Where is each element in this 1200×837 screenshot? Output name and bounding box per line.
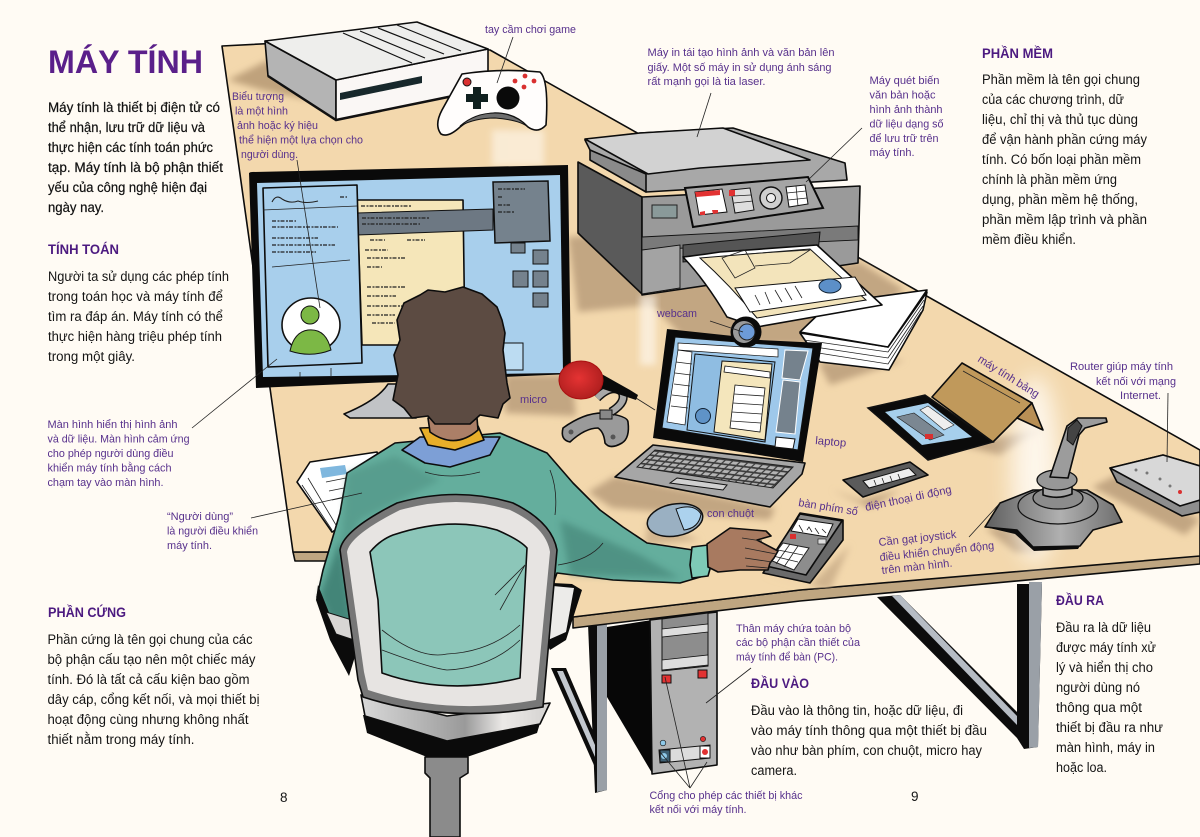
callout: icon: thể hiện một lựa chọn cho	[239, 134, 363, 146]
callout: printer	[648, 47, 834, 137]
callout: router	[1070, 361, 1176, 462]
label: webcam: webcam	[656, 308, 697, 320]
text block: input	[751, 703, 987, 778]
callout: joystick: Cần gạt joystick	[878, 529, 957, 549]
text block: software: để vận hành phần cứng máy	[982, 132, 1147, 147]
desk shadows and highlights	[228, 60, 1200, 590]
page number 8: 8	[280, 790, 288, 805]
grey bar	[357, 209, 493, 235]
laptop screen frame	[653, 329, 822, 462]
callout: ports: kết nối với máy tính.	[650, 804, 746, 816]
joystick base	[985, 490, 1122, 547]
small window	[503, 343, 523, 370]
mic ball	[559, 361, 603, 399]
text block: hardware: dây cáp, cổng kết nối, và mọi thiết bị	[48, 692, 260, 707]
callout: scanner: máy tính.	[870, 147, 914, 159]
laptop display	[662, 337, 813, 450]
text block: software: Phần mềm là tên gọi chung	[982, 72, 1140, 87]
callout: scanner	[806, 75, 944, 182]
callout: router: kết nối với mạng	[1096, 376, 1176, 388]
callout: user: là người điều khiển	[167, 526, 258, 538]
callout: printer: giấy. Một số máy in sử dụng ánh sáng	[648, 62, 832, 74]
paper stack	[800, 290, 927, 370]
text block: software: liệu, chỉ thị và thủ tục dùng	[982, 112, 1138, 127]
joystick	[985, 418, 1122, 551]
callout: joystick	[878, 503, 1000, 577]
tablet body	[868, 395, 993, 460]
numeric keypad	[763, 513, 843, 583]
printed paper	[683, 245, 882, 327]
icon: user avatar	[282, 298, 340, 354]
callout: scanner: để lưu trữ trên	[870, 133, 938, 145]
callout: screen: và dữ liệu. Màn hình cảm ứng	[48, 434, 190, 446]
printer side	[578, 162, 642, 294]
text block: output: thông qua một	[1056, 700, 1142, 715]
label: laptop: laptop	[815, 435, 847, 450]
text block: introduction: thể nhận, lưu trữ dữ liệu và	[48, 120, 205, 135]
printer lid	[585, 128, 847, 192]
callout: screen: chạm tay vào màn hình.	[48, 477, 164, 489]
person	[317, 287, 778, 640]
text block: input: Đầu vào là thông tin, hoặc dữ liệu, đi	[751, 703, 963, 718]
text block: hardware	[48, 632, 260, 747]
label: mouse: con chuột	[707, 508, 755, 520]
callout: user	[167, 493, 362, 552]
label: microphone: micro	[520, 394, 547, 406]
joystick handle	[1050, 418, 1107, 478]
text block: software: tính. Có bốn loại phần mềm	[982, 152, 1141, 167]
text block: output: được máy tính xử	[1056, 640, 1156, 655]
title: MÁY TÍNH	[48, 44, 203, 80]
desk legs	[551, 582, 1042, 793]
callout: scanner: hình ảnh thành	[870, 104, 942, 116]
label: tablet: máy tính bảng	[975, 353, 1041, 401]
page number 9: 9	[911, 789, 919, 804]
sweater	[317, 433, 710, 620]
text block: calculation: tìm ra đáp án. Máy tính có thể	[48, 309, 223, 324]
text block: introduction	[48, 100, 223, 215]
chair seat	[363, 715, 541, 757]
callout: icon: ảnh hoặc ký hiệu	[237, 120, 318, 132]
chair back padding	[347, 502, 550, 706]
label: mobile phone: điện thoại di động	[864, 484, 953, 514]
router	[1110, 455, 1200, 516]
game console	[265, 22, 488, 120]
heading: software: PHẦN MỀM	[982, 46, 1053, 61]
text block: output: thiết bị đầu ra như	[1056, 720, 1163, 735]
text block: output: hoặc loa.	[1056, 760, 1107, 775]
callout: icon: là một hình	[235, 106, 288, 118]
ports	[659, 736, 710, 763]
callout: ports: Cổng cho phép các thiết bị khác	[650, 790, 803, 802]
label: numeric keypad: bàn phím số	[798, 497, 859, 518]
left window panel	[263, 185, 362, 367]
newspaper	[297, 452, 390, 532]
text block: input: camera.	[751, 763, 797, 778]
text block: calculation: trong một giây.	[48, 349, 135, 364]
callout: router: Router giúp máy tính	[1070, 361, 1173, 373]
callout: joystick: điều khiển chuyển động	[879, 540, 995, 564]
small app tiles	[513, 250, 548, 307]
mesh back	[370, 524, 527, 686]
callout: scanner: Máy quét biến	[870, 75, 940, 87]
text block: software: dụng, phần mềm hệ thống,	[982, 192, 1138, 207]
cuff	[690, 545, 712, 578]
desk underside band	[293, 552, 1200, 628]
callout: computer tower: máy tính để bàn (PC).	[736, 652, 838, 664]
heading: input: ĐẦU VÀO	[751, 676, 809, 691]
text block: output: lý và hiển thị cho	[1056, 660, 1153, 675]
callout: scanner: dữ liệu dạng số	[870, 118, 944, 130]
callout: icon	[232, 91, 363, 308]
callout: router: Internet.	[1120, 390, 1161, 402]
text block: introduction: Máy tính là thiết bị điện tử có	[48, 100, 220, 115]
text block: calculation: thực hiện hàng triệu phép tính	[48, 329, 222, 344]
text block: calculation: Người ta sử dụng các phép tính	[48, 269, 229, 284]
callout: joystick: trên màn hình.	[881, 558, 953, 577]
callout: ports	[650, 677, 803, 816]
drive bays	[662, 613, 708, 671]
text block: hardware: bộ phận cấu tạo nên một chiếc máy	[48, 652, 256, 667]
text block: software: mềm điều khiển.	[982, 232, 1076, 247]
control panel	[685, 177, 823, 227]
text block: hardware: tính. Đó là tất cả cấu kiện bao gồm	[48, 672, 250, 687]
text block: output: màn hình, máy in	[1056, 740, 1155, 755]
callout: scanner: văn bản hoặc	[870, 90, 936, 102]
callout: printer: Máy in tái tạo hình ảnh và văn bản lên	[648, 47, 834, 59]
laptop base	[615, 445, 805, 507]
monitor frame	[249, 165, 571, 388]
callout: user: “Người dùng”	[167, 511, 233, 523]
text block: software: chính là phần mềm ứng	[982, 172, 1117, 187]
callout: game controller: tay cầm chơi game	[485, 24, 576, 36]
chair column	[425, 757, 468, 837]
cream document	[357, 200, 465, 345]
callout: computer tower: các bộ phận cần thiết của	[736, 637, 861, 649]
mic stand base	[562, 413, 628, 446]
heading: hardware: PHẦN CỨNG	[48, 605, 126, 620]
text block: software: phần mềm lập trình và phần	[982, 212, 1147, 227]
callout: computer tower	[706, 623, 861, 703]
text block: introduction: ngày nay.	[48, 200, 104, 215]
text block: hardware: hoạt động cùng nhưng không nhất	[48, 712, 249, 727]
callout: screen	[48, 359, 277, 489]
text block: calculation	[48, 269, 229, 364]
callout: icon: người dùng.	[241, 149, 298, 161]
text block: software	[982, 72, 1147, 247]
laptop keyboard	[637, 450, 793, 488]
callout: game controller	[485, 24, 576, 83]
callout: screen: cho phép người dùng điều	[48, 448, 174, 460]
callout: computer tower: Thân máy chứa toàn bộ	[736, 623, 851, 635]
grey panel	[493, 181, 550, 253]
text block: introduction: thực hiện các tính toán phức	[48, 140, 213, 155]
tablet	[868, 363, 1043, 460]
text block: introduction: tạp. Máy tính là bộ phận thiết	[48, 160, 223, 175]
mobile phone	[843, 462, 928, 497]
text block: output	[1056, 620, 1163, 775]
callout: printer: rất mạnh gọi là tia laser.	[648, 76, 766, 88]
heading: calculation: TÍNH TOÁN	[48, 242, 119, 257]
mic handle and cable	[598, 372, 638, 400]
callout: user: máy tính.	[167, 540, 212, 552]
printer	[578, 128, 882, 327]
text block: introduction: yếu của công nghệ hiện đại	[48, 180, 207, 195]
text block: output: người dùng nó	[1056, 680, 1140, 695]
desk top	[222, 42, 1200, 617]
desktop monitor	[249, 165, 571, 418]
office chair	[316, 494, 582, 837]
left armrest	[316, 585, 357, 676]
webcam	[730, 316, 762, 348]
illustration: computer desk scene	[222, 22, 1200, 837]
text block: output: Đầu ra là dữ liệu	[1056, 620, 1151, 635]
computer mouse	[645, 499, 705, 541]
text block: input: vào máy tính thông qua một thiết bị đầu	[751, 723, 987, 738]
game controller	[438, 70, 547, 135]
collar and neck	[402, 437, 500, 467]
right armrest	[545, 583, 582, 650]
hair	[393, 287, 510, 424]
tablet case	[932, 363, 1032, 442]
computer tower	[650, 612, 717, 774]
text block: hardware: Phần cứng là tên gọi chung của các	[48, 632, 253, 647]
label: webcam	[656, 308, 743, 332]
power buttons	[662, 675, 671, 683]
screen	[257, 175, 563, 377]
microphone	[559, 361, 655, 446]
callout: screen: Màn hình hiển thị hình ảnh	[48, 419, 178, 431]
text block: input: vào như bàn phím, con chuột, micro hay	[751, 743, 982, 758]
joystick collar	[1043, 480, 1072, 497]
printer front	[642, 186, 860, 295]
laptop	[615, 329, 822, 507]
text block: calculation: trong toán học và máy tính để	[48, 289, 223, 304]
text block: hardware: thiết nằm trong máy tính.	[48, 732, 194, 747]
hand	[707, 528, 778, 572]
chair back frame	[340, 494, 557, 714]
text block: software: của các chương trình, dữ	[982, 92, 1124, 107]
monitor stand	[344, 384, 416, 418]
heading: output: ĐẦU RA	[1056, 593, 1104, 608]
trackpad	[670, 478, 727, 490]
callout: icon: Biểu tượng	[232, 91, 284, 103]
callout: screen: khiển máy tính bằng cách	[48, 462, 172, 474]
